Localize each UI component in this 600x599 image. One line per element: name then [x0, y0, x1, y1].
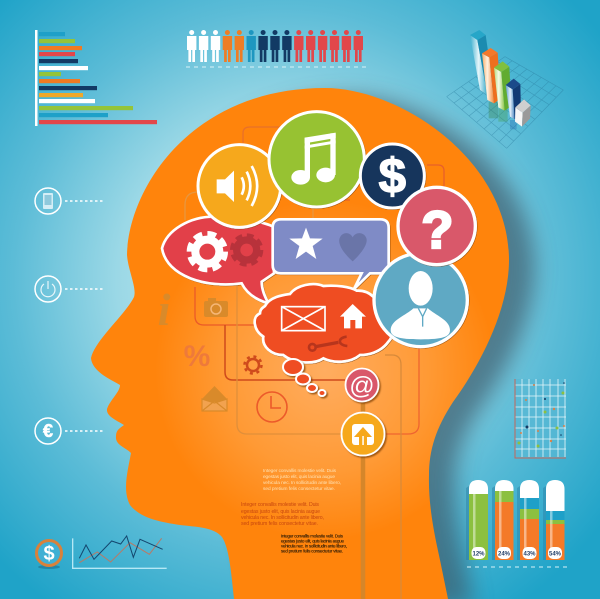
navy bar — [506, 79, 521, 119]
head shadow — [153, 96, 535, 599]
text block: red: Integer convallis molestie velit. Duis — [241, 502, 319, 508]
icon: white gear — [190, 234, 225, 269]
icon: dollar coin: $ — [43, 543, 55, 565]
red speech bubble — [162, 217, 274, 303]
text block: light: sed pretium felis consectetur vitae. — [263, 486, 335, 492]
tube chart — [466, 480, 567, 567]
dollar circle: $ — [379, 149, 406, 204]
text block: dark: egestas justo elit, quis lacinia augue — [281, 538, 345, 544]
icon: percent: % — [184, 340, 210, 373]
icon: home — [340, 304, 366, 328]
thought cloud — [255, 284, 392, 362]
text block: light: Integer convallis molestie velit. Duis — [263, 468, 337, 474]
music circle — [269, 112, 364, 207]
icon: camera — [204, 298, 228, 317]
tube: 54%: 54% — [549, 552, 562, 558]
question circle: ? — [421, 201, 453, 260]
text block: light: vehicula nec. In sollicitudin ante libero, — [263, 480, 341, 486]
icon: small gear — [244, 356, 262, 374]
icon: wrench — [309, 337, 347, 351]
text block: dark: sed pretium felis consectetur vitae. — [281, 548, 343, 554]
text block: red: vehicula nec. In sollicitudin ante libero, — [241, 515, 324, 521]
blue bar — [470, 30, 493, 95]
person circle — [374, 253, 467, 347]
green bar — [494, 61, 511, 111]
question circle — [398, 187, 475, 265]
text block: light: egestas justo elit, quis lacinia augue — [263, 474, 335, 480]
bar chart: top left — [35, 30, 157, 126]
scatter chart — [515, 379, 566, 458]
people pictogram — [186, 30, 366, 67]
sound circle — [198, 145, 281, 227]
thought bubbles — [283, 359, 326, 396]
bar reflections — [489, 102, 517, 129]
icon: euro with dotted leader: € — [43, 421, 53, 441]
circuit lines inside the head — [185, 127, 444, 599]
text block: light — [263, 468, 341, 492]
text block: red: sed pretium felis consectetur vitae. — [241, 521, 318, 527]
text block: dark — [281, 534, 347, 554]
text block: dark: Integer convallis molestie velit. Duis — [281, 534, 344, 538]
dollar circle — [360, 144, 424, 208]
icon: info i: i — [158, 284, 171, 335]
head silhouette — [91, 88, 509, 599]
tube: 24%: 24% — [498, 552, 511, 558]
icon: open envelope — [202, 386, 227, 411]
icon: dollar coin — [36, 540, 62, 569]
tube: 43%: 43% — [523, 552, 536, 558]
3D bar chart — [447, 30, 563, 148]
perspective grid — [447, 57, 563, 148]
icon: dark gear — [232, 236, 261, 264]
white bar — [515, 99, 531, 127]
icon: clock — [257, 392, 287, 422]
icon: euro with dotted leader — [35, 418, 105, 444]
icon: star — [289, 228, 323, 259]
orange bar — [482, 48, 501, 103]
tube: 12%: 12% — [472, 552, 485, 558]
up arrow circle — [342, 412, 384, 456]
text block: red — [241, 502, 324, 527]
speech bubble cluster — [162, 112, 475, 362]
icon: mail — [282, 307, 325, 331]
icon: power with dotted leader — [35, 276, 105, 302]
purple speech bubble — [273, 219, 389, 289]
line chart — [73, 536, 167, 568]
at sign circle: @ — [349, 372, 375, 400]
text block: red: egestas justo elit, quis lacinia augue — [241, 509, 320, 515]
icon: phone with dotted leader — [35, 188, 105, 214]
text block: dark: vehicula nec. In sollicitudin ante libero, — [281, 544, 347, 548]
icon: heart — [339, 233, 367, 261]
at sign circle — [346, 368, 378, 402]
